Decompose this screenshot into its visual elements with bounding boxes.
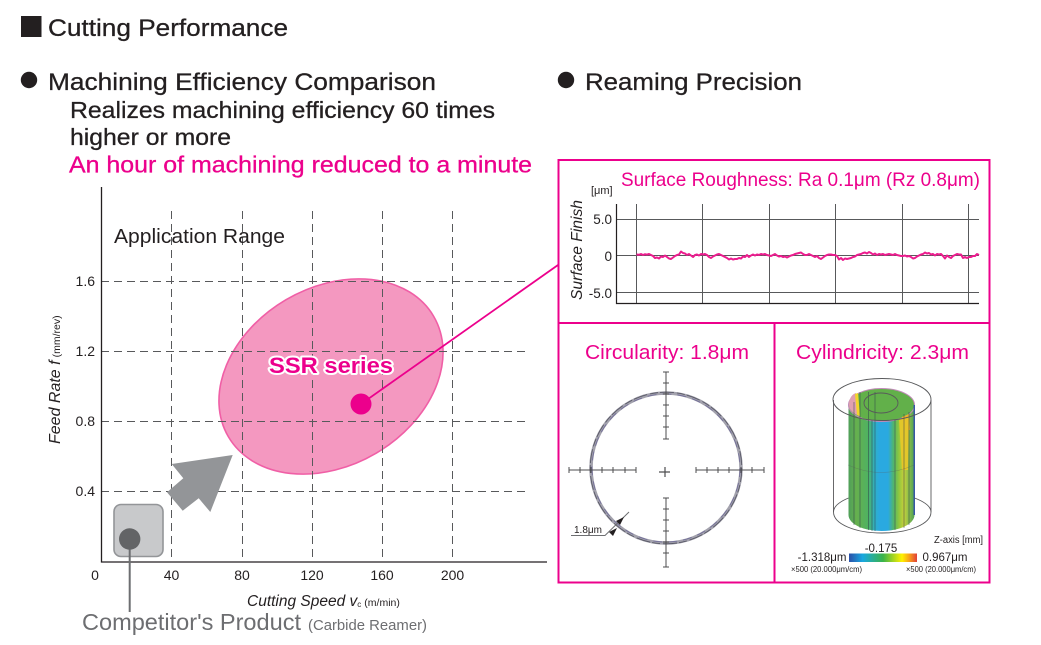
SSR series range ellipse bbox=[183, 239, 479, 514]
x axis title: Cutting Speed v bbox=[247, 593, 359, 610]
section heading: Cutting Performance: Cutting Performance bbox=[48, 15, 288, 42]
competitor marker and leader bbox=[119, 528, 140, 612]
left scale note: ×500 (20.000μm/cm) bbox=[791, 565, 862, 574]
heading: Reaming Precision: Reaming Precision bbox=[585, 69, 802, 96]
y axis tick labels: 0.4 bbox=[76, 483, 95, 499]
panel: surface roughness bbox=[569, 169, 980, 304]
roundness plot bbox=[569, 372, 764, 567]
x axis tick labels: 80 bbox=[234, 567, 250, 583]
x axis tick labels: 0 bbox=[91, 567, 99, 583]
panel: circularity bbox=[569, 342, 764, 567]
y axis title: Feed Rate f(mm/rev) bbox=[47, 315, 64, 444]
outer wireframe bbox=[833, 378, 931, 533]
colour scale bbox=[849, 554, 917, 562]
dimension callout: 1.8μm bbox=[574, 525, 602, 536]
scale minimum: -1.318μm bbox=[798, 552, 846, 564]
heading: Machining Efficiency Comparison: Machining Efficiency Comparison bbox=[48, 69, 436, 96]
arrow: improvement direction bbox=[167, 455, 233, 512]
surface stripes bbox=[854, 392, 909, 531]
x axis tick labels: 160 bbox=[370, 567, 394, 583]
competitor range box bbox=[114, 504, 163, 556]
y axis tick labels bbox=[76, 273, 95, 499]
label: Competitor's Product: Competitor's Product bbox=[82, 609, 302, 635]
axes bbox=[102, 187, 547, 562]
title: Surface Roughness: Ra 0.1μm (Rz 0.8μm) bbox=[621, 169, 980, 191]
y axis tick labels: 1.2 bbox=[76, 343, 95, 359]
crosshair scales bbox=[569, 372, 764, 567]
text block: efficiency summary: An hour of machining reduced to a minute bbox=[69, 152, 532, 178]
unit label: [μm] bbox=[591, 185, 613, 197]
x axis title: c bbox=[357, 600, 361, 609]
label: Application Range: Application Range bbox=[114, 226, 285, 248]
y axis tick labels bbox=[589, 212, 612, 301]
inner measured surface bbox=[848, 403, 914, 531]
x axis title: (m/min) bbox=[364, 597, 400, 609]
panel: cylindricity bbox=[791, 342, 983, 574]
label: Competitor's Product bbox=[82, 609, 427, 635]
SSR marker and leader line bbox=[350, 265, 558, 414]
y axis tick labels: 0 bbox=[604, 249, 612, 264]
text block: efficiency summary bbox=[69, 97, 532, 178]
title: Circularity: 1.8μm bbox=[585, 342, 749, 364]
mid value: -0.175 bbox=[865, 543, 897, 555]
x axis tick labels: 120 bbox=[300, 567, 324, 583]
chart: application range bbox=[47, 187, 558, 635]
scale maximum: 0.967μm bbox=[922, 552, 967, 564]
top opening of surface bbox=[848, 388, 914, 430]
surface profile trace bbox=[636, 252, 979, 260]
y axis tick labels: 1.6 bbox=[76, 273, 95, 289]
cylinder plot bbox=[833, 378, 931, 533]
y axis tick labels: 5.0 bbox=[593, 212, 612, 227]
text block: efficiency summary: higher or more bbox=[70, 124, 231, 150]
label: Competitor's Product: (Carbide Reamer) bbox=[308, 618, 427, 634]
y axis title: Surface Finish bbox=[569, 200, 586, 300]
text block: efficiency summary: Realizes machining efficiency 60 times bbox=[70, 97, 495, 123]
right edge blue band bbox=[914, 405, 915, 515]
dimension callout bbox=[571, 512, 629, 536]
panel: reaming precision frame bbox=[558, 160, 990, 582]
y axis tick labels: -5.0 bbox=[589, 286, 612, 301]
yellow highlight bbox=[899, 416, 909, 470]
x axis tick labels: 40 bbox=[164, 567, 179, 583]
measured circle bbox=[590, 392, 742, 544]
x axis tick labels: 200 bbox=[441, 567, 464, 583]
right scale note: ×500 (20.000μm/cm) bbox=[906, 565, 976, 574]
line chart grid bbox=[616, 204, 979, 304]
y axis tick labels: 0.8 bbox=[76, 413, 95, 429]
title: Cylindricity: 2.3μm bbox=[796, 342, 969, 364]
x axis tick labels bbox=[91, 567, 464, 583]
label: SSR series: SSR series bbox=[269, 353, 393, 378]
grid lines bbox=[101, 211, 526, 562]
axis label: Z-axis [mm] bbox=[934, 535, 983, 546]
